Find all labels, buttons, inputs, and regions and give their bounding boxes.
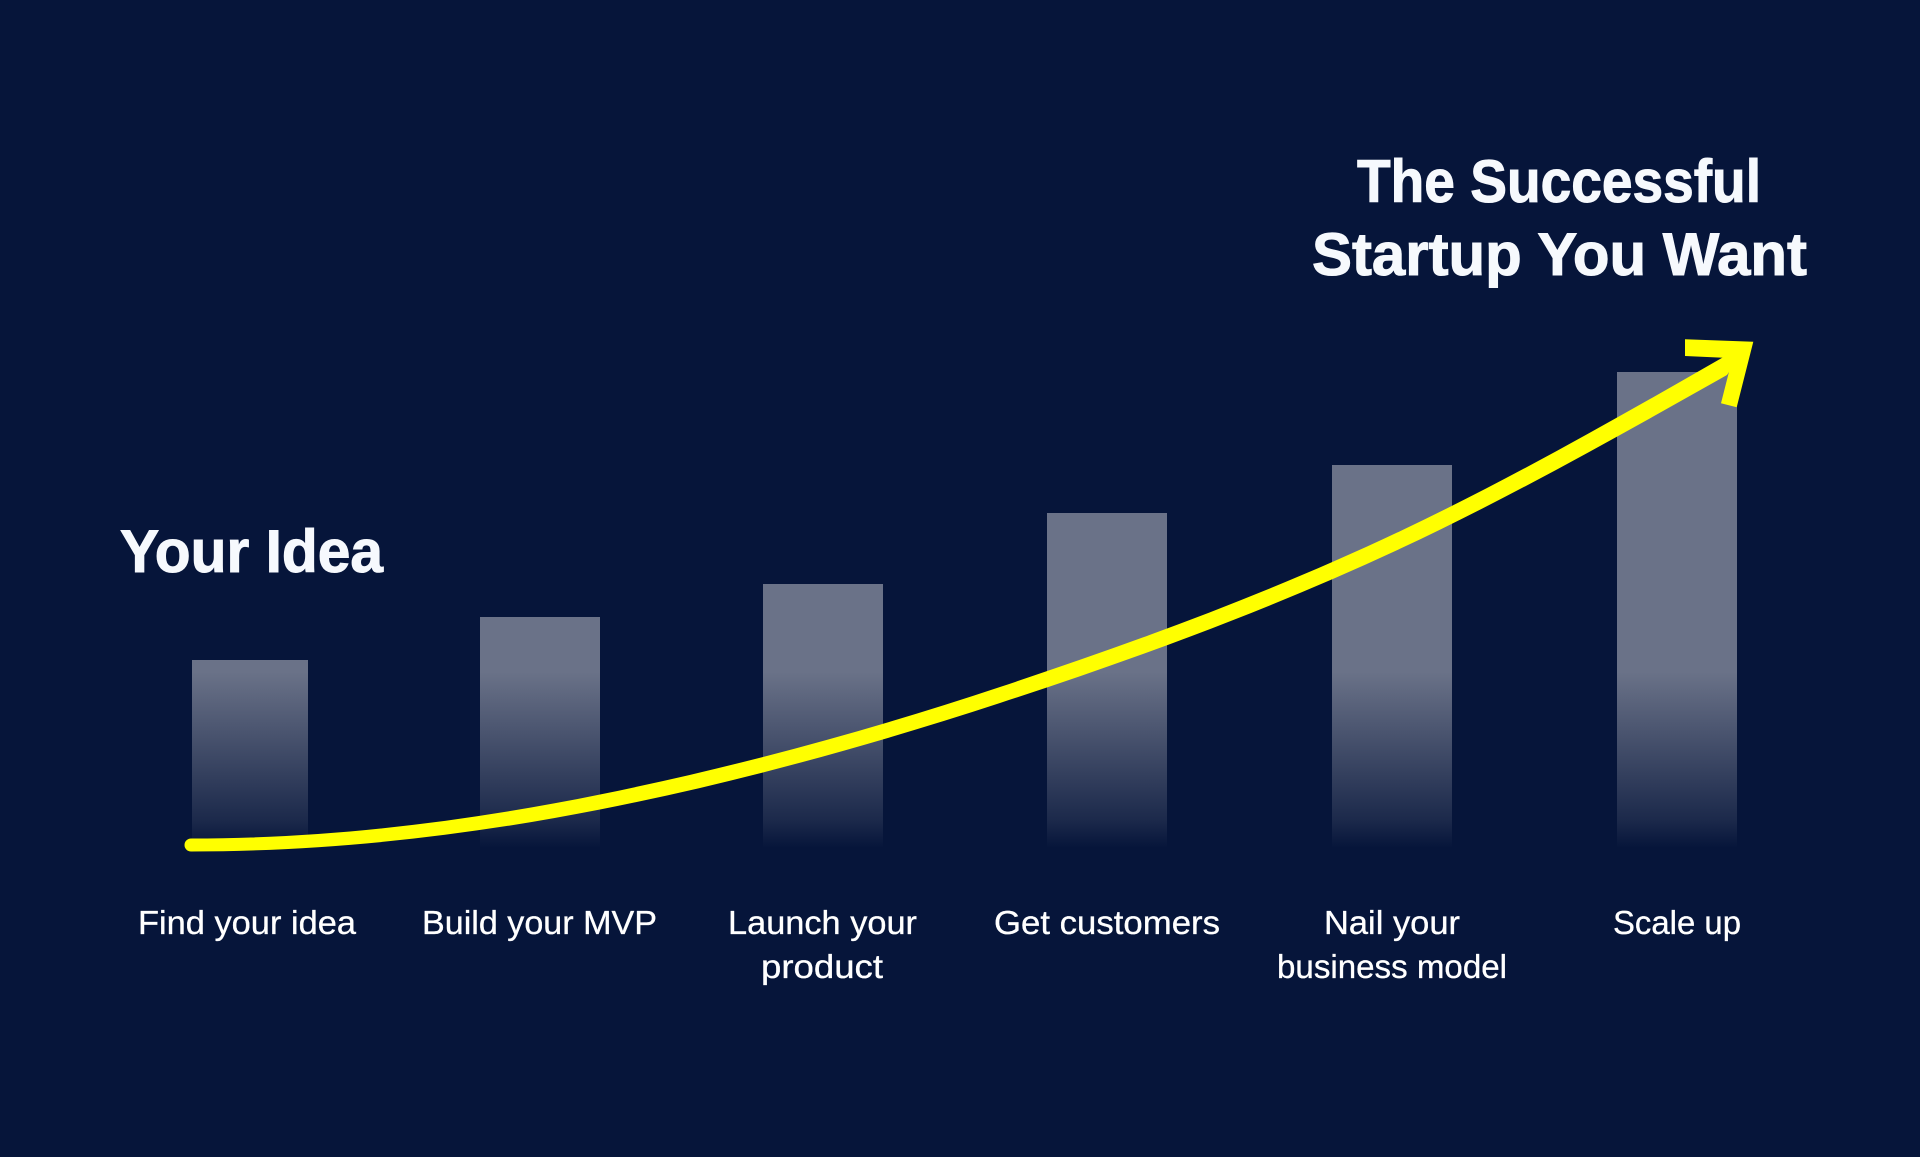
bar: find your idea [192, 660, 308, 848]
bar: nail your business model [1332, 465, 1452, 848]
heading: the successful startup you want: The Successful [1357, 148, 1761, 215]
arrow shaft [185, 350, 1745, 852]
label: launch your product: Launch your [728, 904, 917, 941]
heading: the successful startup you want [1312, 148, 1807, 288]
label: build your MVP: Build your MVP [422, 904, 657, 941]
label: get customers: Get customers [994, 904, 1220, 941]
bar: launch your product [763, 584, 883, 848]
label: nail your business model: business model [1277, 948, 1507, 985]
label: nail your business model [1277, 904, 1507, 985]
label: launch your product: product [761, 948, 883, 985]
label: scale up: Scale up [1613, 904, 1741, 941]
label: nail your business model: Nail your [1324, 904, 1460, 941]
bar: scale up [1617, 372, 1737, 848]
bar: build your MVP [480, 617, 600, 848]
heading: the successful startup you want: Startup You Want [1312, 221, 1807, 288]
heading: your idea: Your Idea [120, 518, 384, 585]
bar chart [192, 372, 1737, 848]
bar: get customers [1047, 513, 1167, 848]
label: find your idea: Find your idea [138, 904, 357, 941]
label: launch your product [728, 904, 917, 985]
arrow head [1685, 339, 1753, 407]
arrow: growth curve [185, 339, 1753, 852]
